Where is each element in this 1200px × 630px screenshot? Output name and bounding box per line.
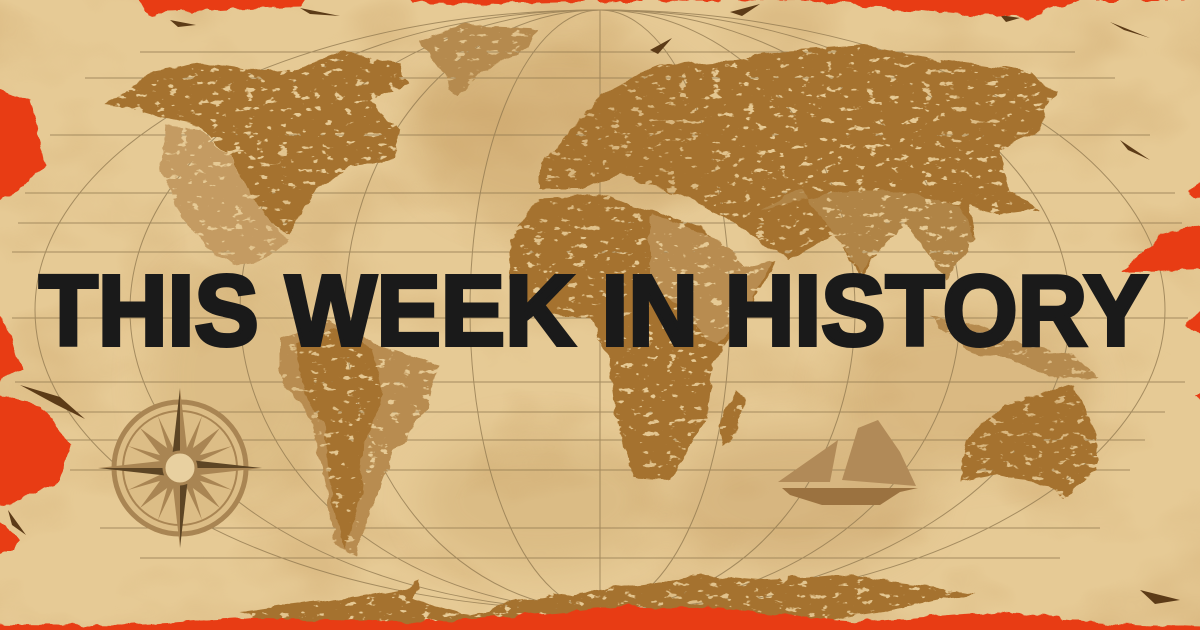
border: right	[1122, 175, 1200, 405]
icon: compass rose	[98, 388, 262, 548]
continent: Antarctica	[240, 575, 975, 630]
border: top	[130, 0, 1200, 18]
continent: Eurasia	[540, 45, 1055, 280]
border: left	[0, 85, 72, 552]
world map	[105, 25, 1100, 630]
continent: Australia	[958, 385, 1098, 498]
border: bottom	[0, 606, 1200, 630]
island: Southeast Asia	[930, 315, 1100, 380]
continent: North America	[105, 52, 408, 235]
continent: Western United States and Mexico	[160, 125, 290, 265]
continent: Africa	[508, 195, 775, 480]
continent: South America	[280, 320, 440, 555]
title: THIS WEEK IN HISTORY	[39, 255, 1148, 367]
island: Madagascar	[718, 392, 745, 445]
icon: sailing ship	[778, 420, 918, 505]
continent: Greenland	[418, 25, 540, 98]
